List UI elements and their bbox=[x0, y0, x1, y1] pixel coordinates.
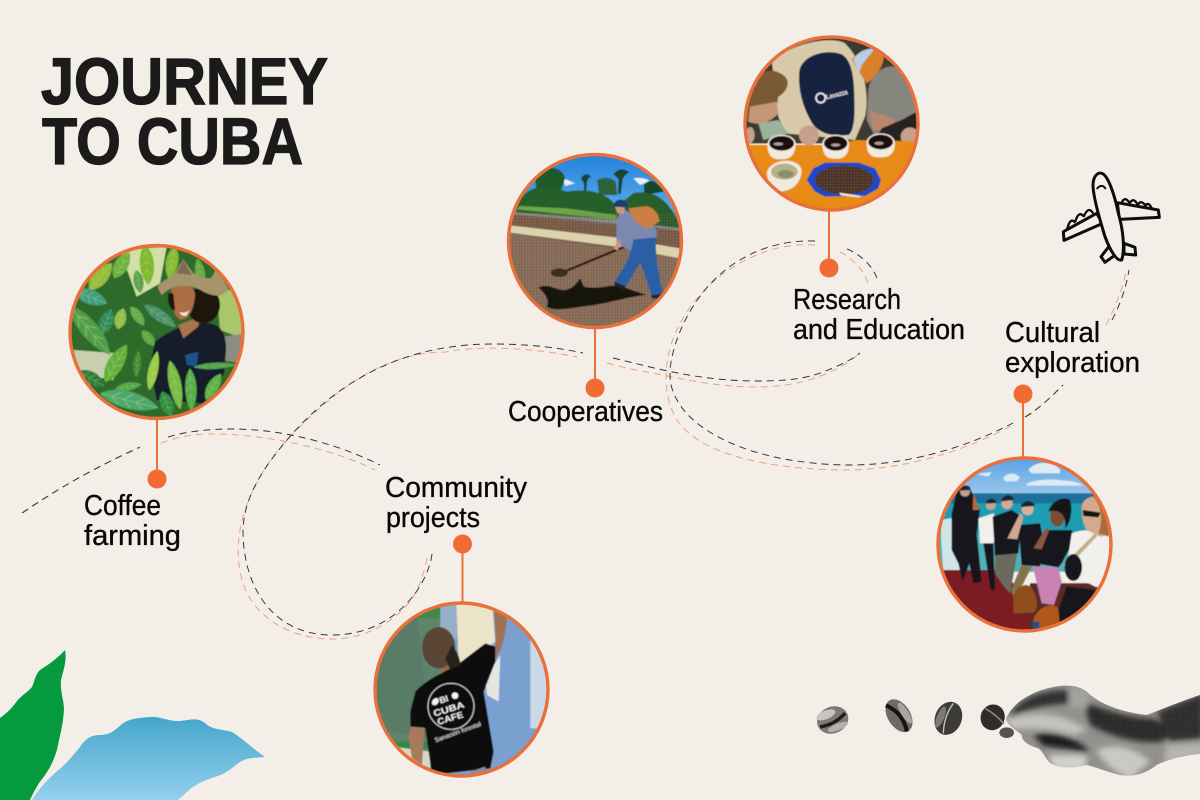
table bbox=[750, 139, 914, 208]
leaf: green bbox=[0, 650, 66, 800]
palms bbox=[535, 168, 565, 193]
photo: community projects: CAFE bbox=[436, 710, 464, 727]
route: dark dashed line bbox=[22, 241, 1129, 635]
bean 4 bbox=[977, 701, 1014, 738]
title: TO CUBA bbox=[42, 104, 303, 178]
people bbox=[952, 486, 982, 583]
photo: cooperatives bbox=[506, 152, 684, 330]
photo: community projects bbox=[373, 601, 550, 778]
right woman bbox=[1067, 530, 1112, 590]
label: community projects bbox=[385, 472, 528, 534]
label: coffee farming: Coffee bbox=[84, 490, 161, 522]
label: community projects: Community bbox=[385, 472, 528, 504]
label: community projects: projects bbox=[386, 502, 480, 534]
man bbox=[494, 612, 507, 658]
t-shirt logo bbox=[428, 683, 474, 729]
label: research and education bbox=[793, 284, 965, 346]
label: research and education: Research bbox=[793, 284, 901, 316]
person bbox=[617, 209, 657, 252]
photo: community projects: Sanación forestal bbox=[434, 721, 482, 744]
photo: research and education: Lavazza bbox=[825, 89, 849, 101]
photo: research and education bbox=[743, 35, 920, 212]
label: cultural exploration: exploration bbox=[1005, 347, 1140, 379]
title: JOURNEY bbox=[41, 44, 328, 118]
left person bbox=[745, 71, 788, 123]
connector lines bbox=[157, 210, 1023, 603]
right person bbox=[867, 67, 917, 137]
blue filter with beans bbox=[807, 163, 881, 197]
icon: airplane bbox=[1063, 173, 1159, 262]
shadow bbox=[538, 278, 647, 309]
photo: coffee farming bbox=[68, 244, 245, 420]
photo: community projects: BI bbox=[438, 693, 450, 706]
photo: cultural exploration bbox=[936, 456, 1113, 633]
bean 3 bbox=[930, 698, 967, 739]
woman: clothes, face, hat bbox=[150, 323, 226, 403]
leaves: green and blue bbox=[0, 650, 265, 800]
label: cooperatives: Cooperatives bbox=[508, 396, 663, 428]
route: orange dashed line bbox=[23, 245, 1126, 639]
leaf: blue bbox=[32, 717, 265, 800]
label: cultural exploration bbox=[1005, 317, 1140, 379]
title bbox=[41, 44, 328, 178]
bags bbox=[1013, 585, 1037, 613]
marker dots bbox=[148, 258, 1032, 554]
label: research and education: and Education bbox=[793, 314, 965, 346]
bean 1 bbox=[813, 702, 852, 738]
photo: community projects: CUBA bbox=[432, 699, 466, 719]
label: cultural exploration: Cultural bbox=[1005, 317, 1100, 349]
label: coffee farming bbox=[84, 490, 181, 552]
bean 2 bbox=[880, 694, 918, 737]
navy cap bbox=[799, 52, 855, 136]
coffee beans and hand bbox=[816, 686, 1200, 776]
cups bbox=[767, 133, 895, 191]
label: coffee farming: farming bbox=[84, 520, 181, 552]
hand bbox=[1006, 686, 1200, 776]
dashed journey route bbox=[22, 241, 1129, 639]
